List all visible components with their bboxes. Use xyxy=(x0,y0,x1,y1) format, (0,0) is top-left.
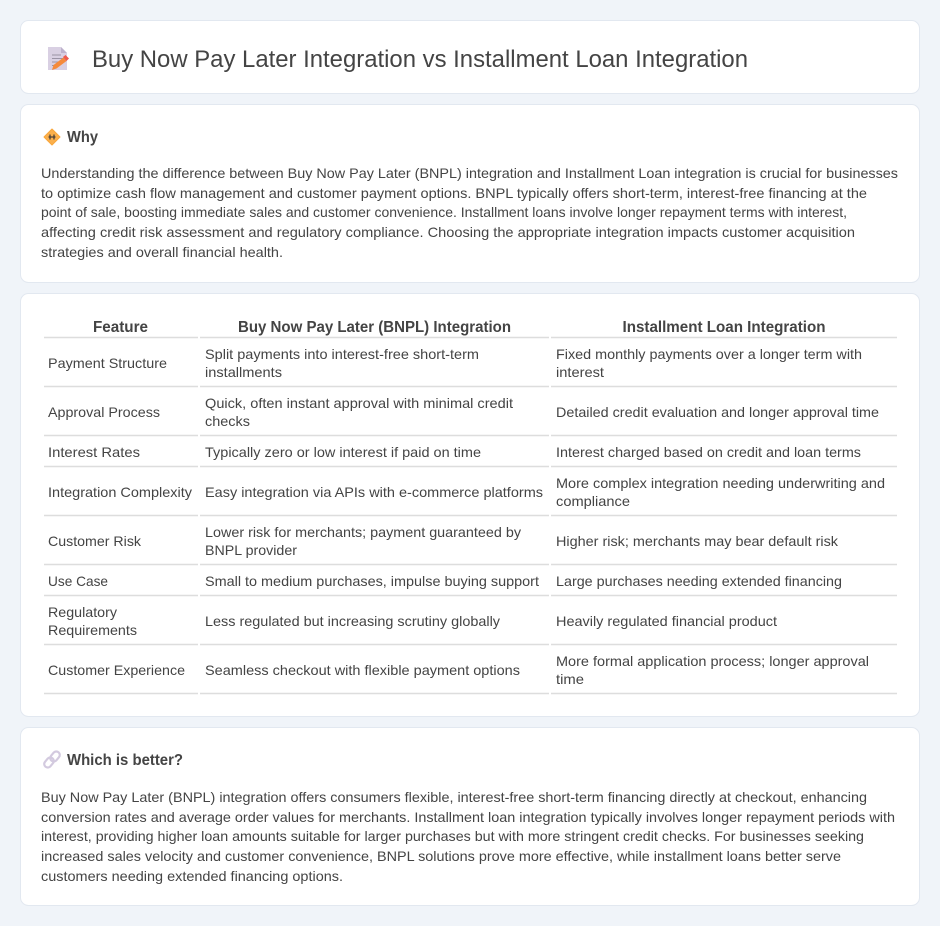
row: interest rates: Interest charged based on credit and loan terms xyxy=(556,444,861,460)
row: payment structure xyxy=(48,346,862,380)
row: regulatory requirements: Requirements xyxy=(48,622,137,638)
text block: why paragraph: strategies and overall financial health. xyxy=(41,244,283,260)
row: use case: Use Case xyxy=(48,573,108,589)
row: customer risk xyxy=(48,524,839,558)
table header xyxy=(93,319,826,336)
row: payment structure: Payment Structure xyxy=(48,355,167,371)
row: regulatory requirements: Heavily regulated financial product xyxy=(556,613,777,629)
row: payment structure: Fixed monthly payments over a longer term with xyxy=(556,346,862,362)
row: customer experience: More formal application process; longer approval xyxy=(556,653,869,669)
panel: comparison table xyxy=(20,294,920,716)
title: Buy Now Pay Later Integration vs Installment Loan Integration xyxy=(92,46,748,73)
row: interest rates xyxy=(48,444,861,460)
text block: which is better paragraph: conversion rates and average order values for merchants. Installment loan integration typically involves longer repayment periods with xyxy=(41,809,895,825)
row: regulatory requirements: Regulatory xyxy=(48,604,117,620)
row: approval process: Quick, often instant approval with minimal credit xyxy=(205,395,513,411)
row: integration complexity: More complex integration needing underwriting and xyxy=(556,475,885,491)
row: payment structure: Split payments into interest-free short-term xyxy=(205,346,479,362)
icon: document with pencil xyxy=(48,47,69,70)
heading: which is better: Which is better? xyxy=(67,752,183,769)
row: payment structure: installments xyxy=(205,364,282,380)
row: approval process: Approval Process xyxy=(48,404,160,420)
row: integration complexity: compliance xyxy=(556,493,630,509)
row: interest rates: Typically zero or low interest if paid on time xyxy=(205,444,481,460)
row: regulatory requirements xyxy=(48,604,777,638)
row: interest rates: Interest Rates xyxy=(48,444,140,460)
row: integration complexity xyxy=(48,475,885,509)
row: use case: Small to medium purchases, impulse buying support xyxy=(205,573,539,589)
row: approval process: checks xyxy=(205,413,250,429)
text block: why paragraph: point of sale, boosting immediate sales and customer convenience. Installment loans involve longer repayment terms with interest, xyxy=(41,204,847,220)
table header: Installment Loan Integration xyxy=(622,319,826,336)
text block: why paragraph: to optimize cash flow management and customer payment options. BNPL typically offers short-term, interest-free financing at the xyxy=(41,185,867,201)
row: customer experience: Customer Experience xyxy=(48,662,185,678)
row: use case xyxy=(48,573,842,589)
row: customer risk: Higher risk; merchants may bear default risk xyxy=(556,533,839,549)
table header: Buy Now Pay Later (BNPL) Integration xyxy=(238,319,511,336)
row: regulatory requirements: Less regulated but increasing scrutiny globally xyxy=(205,613,500,629)
text block: which is better paragraph: Buy Now Pay Later (BNPL) integration offers consumers flexible, interest-free short-term financing directly at checkout, enhancing xyxy=(41,789,867,805)
row: customer risk: Lower risk for merchants; payment guaranteed by xyxy=(205,524,521,540)
icon: chain link xyxy=(43,750,61,769)
row: approval process xyxy=(48,395,879,429)
text block: which is better paragraph: customers needing extended financing options. xyxy=(41,868,343,884)
text block: which is better paragraph xyxy=(41,789,895,884)
row: use case: Large purchases needing extended financing xyxy=(556,573,842,589)
text block: which is better paragraph: increased sales velocity and customer convenience, BNPL solutions prove more effective, while installment loans better serve xyxy=(41,848,841,864)
panel: why xyxy=(20,104,920,282)
row: customer experience: time xyxy=(556,671,584,687)
row: payment structure: interest xyxy=(556,364,604,380)
panel: title header xyxy=(20,20,920,94)
panel: which is better xyxy=(20,728,920,906)
table header: Feature xyxy=(93,319,148,336)
text block: why paragraph: Understanding the difference between Buy Now Pay Later (BNPL) integration and Installment Loan integration is crucial for businesses xyxy=(41,165,898,181)
row: customer experience xyxy=(48,653,869,687)
text block: which is better paragraph: interest, providing higher loan amounts suitable for larger purchases but with more stringent credit checks. For businesses seeking xyxy=(41,828,864,844)
row: customer risk: Customer Risk xyxy=(48,533,142,549)
row: integration complexity: Easy integration via APIs with e-commerce platforms xyxy=(205,484,543,500)
row: integration complexity: Integration Complexity xyxy=(48,484,192,500)
text block: why paragraph: affecting credit risk assessment and regulatory compliance. Choosing the appropriate integration impacts customer acquisition xyxy=(41,224,855,240)
text block: why paragraph xyxy=(41,165,898,260)
row: approval process: Detailed credit evaluation and longer approval time xyxy=(556,404,879,420)
row: customer risk: BNPL provider xyxy=(205,542,297,558)
heading: why: Why xyxy=(67,129,98,146)
row: customer experience: Seamless checkout with flexible payment options xyxy=(205,662,520,678)
icon: orange diamond xyxy=(44,129,60,145)
